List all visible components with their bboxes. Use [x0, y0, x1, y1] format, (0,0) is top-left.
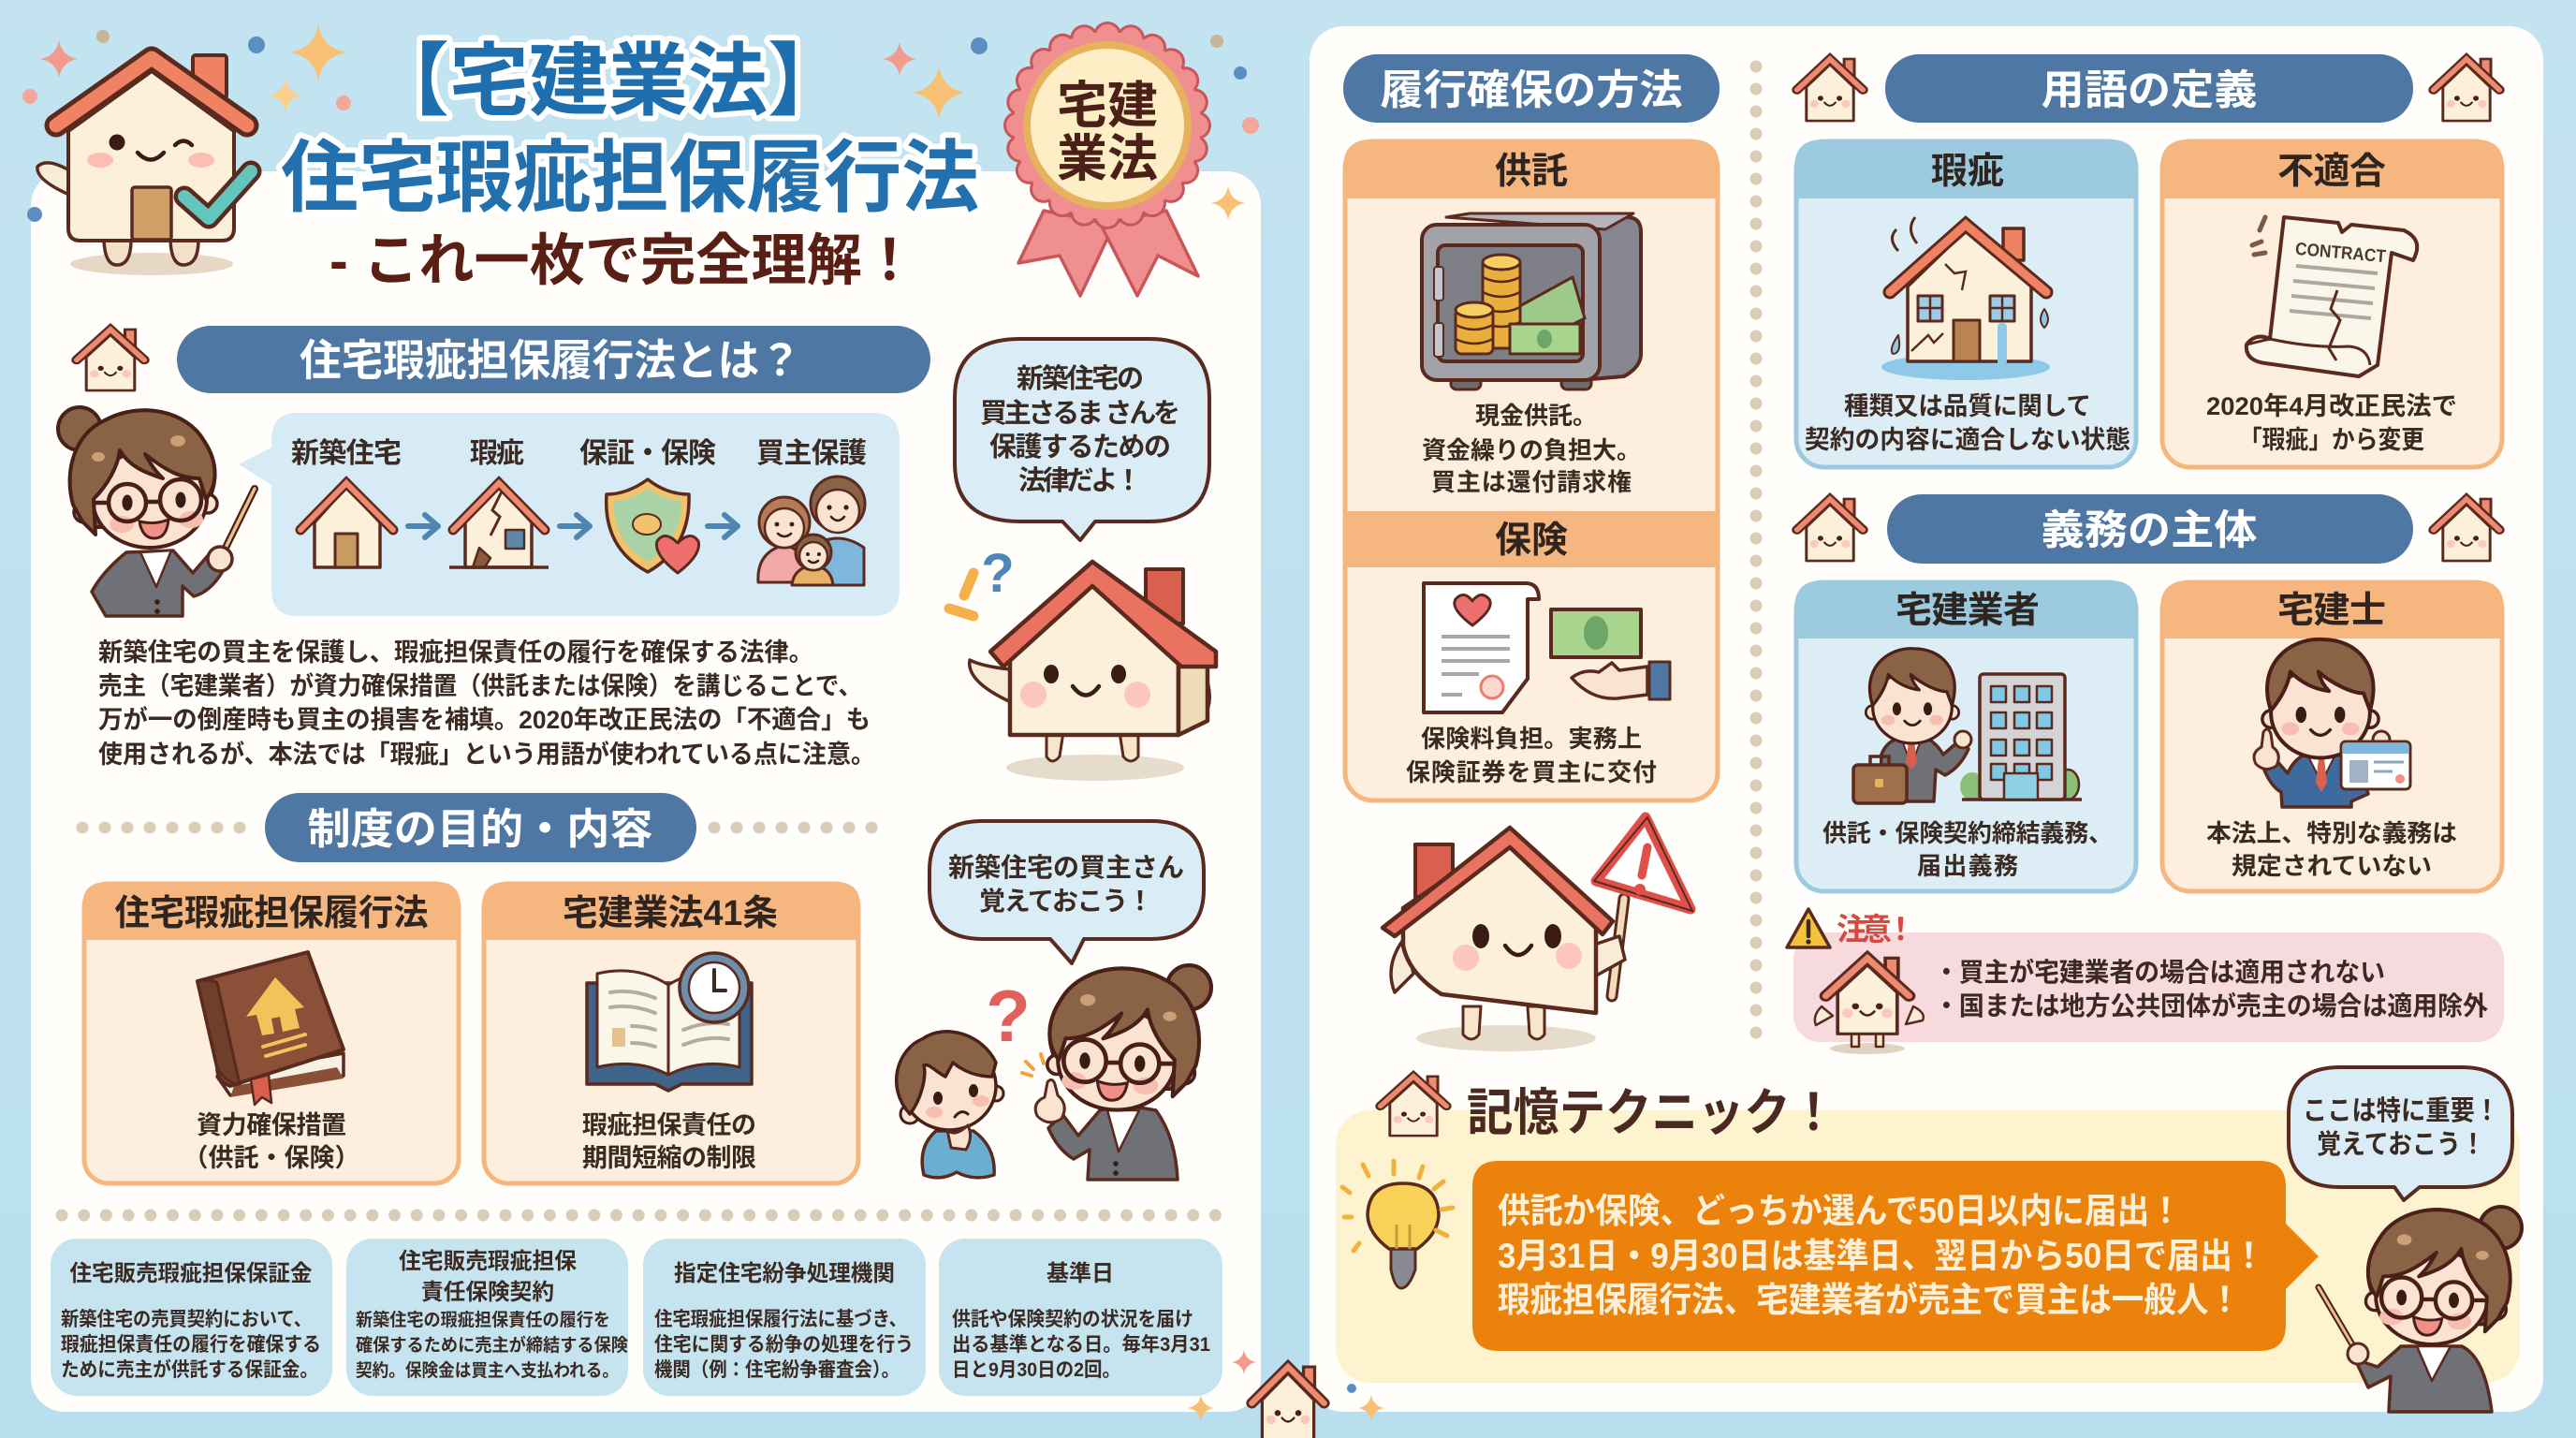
callout: 注意	[1787, 909, 2504, 1054]
icon: safe with money	[1422, 213, 1641, 389]
caption 不適合: 2020年4月改正民法で	[2206, 392, 2457, 420]
text block: law description	[98, 638, 875, 769]
flow label: 保証・保険	[579, 438, 716, 469]
card: 指定住宅紛争処理機関: 住宅瑕疵担保履行法に基づき、	[654, 1309, 907, 1330]
arrow	[560, 515, 590, 537]
icon: businessman with building	[1853, 649, 2082, 803]
icon: mini house	[1797, 59, 1863, 121]
warning items: ・買主が宅建業者の場合は適用されない	[1934, 957, 2385, 987]
badge text: 宅建	[1057, 78, 1158, 134]
caption 宅建士: 本法上、特別な義務は	[2206, 819, 2457, 847]
icon: torn contract	[2247, 217, 2417, 376]
flow label: 瑕疵	[470, 438, 524, 469]
badge: rosette 宅建業法	[1014, 32, 1201, 296]
heading: 義務の主体	[1887, 494, 2413, 564]
arrow	[408, 515, 438, 537]
character: confused boy: ?	[986, 975, 1031, 1057]
panel: left white sheet	[31, 171, 1261, 1412]
card: 供託 and 保険: 保険証券を買主に交付	[1406, 758, 1657, 786]
header 供託: 供託	[1495, 152, 1568, 192]
card: 宅建士: 規定されていない	[2232, 852, 2432, 880]
card: 瑕疵	[1794, 139, 2138, 467]
card: 住宅販売瑕疵担保保証金: ために売主が供託する保証金。	[61, 1358, 318, 1381]
heading: 用語の定義: 用語の定義	[2041, 67, 2258, 113]
caption 供託: 現金供託。	[1475, 402, 1597, 430]
caption 保険: 保険料負担。実務上	[1421, 725, 1642, 753]
mnemonic line: 瑕疵担保履行法、宅建業者が売主で買主は一般人！	[1498, 1281, 2241, 1319]
panel: flow diagram	[239, 413, 900, 616]
heading: 用語の定義	[1885, 54, 2413, 123]
heading: 制度の目的・内容	[77, 793, 878, 862]
title line 3: - これ一枚で完全理解！	[329, 229, 917, 292]
text block: law description: 万が一の倒産時も買主の損害を補填。2020年改正民法の「不適合」も	[98, 705, 871, 734]
caption 瑕疵: 種類又は品質に関して	[1844, 392, 2091, 420]
card: 住宅販売瑕疵担保責任保険契約: 住宅販売瑕疵担保	[399, 1249, 577, 1274]
decorative sparkles around title	[22, 24, 1259, 222]
dotted divider	[62, 1210, 1226, 1221]
speech bubble: protect buyers: 買主さるま さんを	[980, 398, 1180, 429]
card: 不適合	[2160, 139, 2504, 467]
icon: cracked house	[449, 483, 549, 567]
character: house mascot with question mark: ?	[981, 543, 1015, 604]
character: teacher with pointer	[58, 407, 255, 616]
card: 瑕疵: 契約の内容に適合しない状態	[1805, 426, 2130, 454]
card: 住宅販売瑕疵担保保証金: 住宅販売瑕疵担保保証金	[69, 1261, 313, 1286]
speech bubble: important: 覚えておこう！	[2317, 1129, 2485, 1160]
card: 指定住宅紛争処理機関: 住宅に関する紛争の処理を行う	[654, 1334, 914, 1356]
speech bubble: protect buyers	[955, 339, 1209, 540]
icon: licensed agent with ID card	[2254, 639, 2410, 807]
icon: mini house	[2434, 499, 2499, 561]
card: 基準日: 基準日	[1046, 1261, 1114, 1286]
card: 住宅販売瑕疵担保責任保険契約	[346, 1239, 628, 1396]
card: 宅建業者	[1794, 580, 2138, 891]
icon: damaged leaking house	[1881, 217, 2050, 380]
flow label: 新築住宅	[291, 438, 402, 469]
card: 住宅販売瑕疵担保責任保険契約: 新築住宅の瑕疵担保責任の履行を	[356, 1309, 610, 1330]
speech bubble: important	[2289, 1067, 2512, 1200]
arrow	[708, 515, 738, 537]
icon: law book	[198, 952, 344, 1105]
speech bubble: remember	[929, 821, 1204, 963]
card: 住宅販売瑕疵担保保証金: 瑕疵担保責任の履行を確保する	[61, 1334, 321, 1356]
character: teacher with pointer	[2319, 1207, 2522, 1412]
icon: mini house	[1797, 499, 1863, 561]
text block: law description: 売主（宅建業者）が資力確保措置（供託または保険）を講じることで、	[98, 671, 862, 700]
icon: house mascot with check mark	[37, 55, 251, 275]
card: 住宅瑕疵担保履行法: （供託・保険）	[183, 1144, 359, 1172]
card caption: 瑕疵担保責任の	[582, 1111, 756, 1139]
card: 宅建業者: 届出義務	[1917, 852, 2018, 880]
header 保険: 保険	[1495, 521, 1568, 561]
panel: right white sheet	[1310, 26, 2543, 1412]
speech bubble: important: ここは特に重要！	[2303, 1095, 2499, 1126]
speech bubble: protect buyers: 新築住宅の	[1017, 363, 1144, 394]
card: 宅建業法41条: 宅建業法41条	[563, 894, 778, 933]
card: 不適合: 「瑕疵」から変更	[2239, 426, 2424, 454]
heading: 履行確保の方法: 履行確保の方法	[1380, 67, 1683, 113]
caption 宅建業者: 供託・保険契約締結義務、	[1822, 819, 2113, 847]
icon: mini house	[77, 330, 144, 390]
title line 2: 住宅瑕疵担保履行法	[281, 134, 979, 222]
icon: torn contract: CONTRACT	[2294, 240, 2387, 267]
card: 供託 and 保険: 買主は還付請求権	[1431, 468, 1632, 496]
card: 瑕疵: 瑕疵	[1931, 152, 2004, 192]
card: 住宅販売瑕疵担保保証金	[51, 1239, 332, 1396]
callout: 注意: ・国または地方公共団体が売主の場合は適用除外	[1934, 990, 2488, 1020]
heading: 記憶テクニック！: 記憶テクニック！	[1467, 1085, 1837, 1141]
card: 宅建士: 宅建士	[2277, 591, 2386, 631]
heading: 義務の主体: 義務の主体	[2041, 507, 2258, 553]
card: 基準日: 出る基準となる日。毎年3月31	[952, 1334, 1210, 1356]
icon: house	[1381, 1077, 1446, 1136]
dotted vertical divider	[1750, 66, 1762, 1035]
pink box	[1793, 932, 2504, 1042]
icon: bottom center house	[1188, 1350, 1384, 1438]
icon: new house	[300, 483, 393, 567]
card: 宅建業者: 宅建業者	[1895, 591, 2040, 631]
card: 供託 and 保険: 資金繰りの負担大。	[1422, 436, 1641, 464]
title	[281, 37, 979, 292]
card: 住宅瑕疵担保履行法: 住宅瑕疵担保履行法	[114, 894, 429, 933]
heading 注意: 注意！	[1837, 912, 1916, 946]
heading: 住宅瑕疵担保履行法とは？	[177, 326, 930, 393]
character: teacher raising finger	[1022, 965, 1211, 1180]
icon: open book with clock	[587, 953, 752, 1091]
card: 供託 and 保険	[1343, 139, 1720, 800]
speech bubble: protect buyers: 法律だよ！	[1018, 465, 1142, 496]
card: 指定住宅紛争処理機関	[643, 1239, 926, 1396]
icon: house	[1815, 958, 1924, 1054]
text block: law description: 新築住宅の買主を保護し、瑕疵担保責任の履行を確保する法律。	[98, 638, 813, 667]
card: 住宅販売瑕疵担保責任保険契約: 確保するために売主が締結する保険	[356, 1334, 628, 1356]
card: 住宅販売瑕疵担保責任保険契約: 責任保険契約	[421, 1280, 554, 1305]
card: 住宅瑕疵担保履行法	[82, 882, 461, 1183]
character: house mascot with warning sign	[1383, 817, 1692, 1051]
icon: shield and heart	[607, 479, 699, 573]
speech bubble: remember: 覚えておこう！	[979, 887, 1153, 916]
icon: light bulb	[1342, 1161, 1453, 1288]
icon: insurance policy and premium	[1424, 583, 1670, 712]
icon: family	[758, 477, 865, 585]
panel: memory technique	[1336, 1077, 2520, 1383]
card: 宅建士	[2160, 580, 2504, 891]
card: 住宅販売瑕疵担保責任保険契約: 契約。保険金は買主へ支払われる。	[356, 1360, 619, 1381]
card: 住宅販売瑕疵担保保証金: 新築住宅の売買契約において、	[61, 1309, 312, 1330]
flow label: 買主保護	[756, 438, 867, 469]
title line 1: 【宅建業法】	[370, 37, 847, 126]
text block: law description: 使用されるが、本法では「瑕疵」という用語が使われている点に注意。	[98, 740, 875, 769]
card: 宅建業法41条	[482, 882, 860, 1183]
heading: 住宅瑕疵担保履行法とは？: 住宅瑕疵担保履行法とは？	[300, 336, 801, 385]
mnemonic line: 供託か保険、どっちか選んで50日以内に届出！	[1498, 1192, 2182, 1230]
card: 基準日: 供託や保険契約の状況を届け	[952, 1309, 1193, 1330]
character: house mascot with question mark	[949, 543, 1216, 781]
card: 不適合: 不適合	[2277, 152, 2386, 192]
speech bubble: remember: 新築住宅の買主さん	[948, 853, 1184, 882]
card: 基準日: 日と9月30日の2回。	[952, 1359, 1120, 1381]
mnemonic line: 3月31日・9月30日は基準日、翌日から50日で届出！	[1498, 1237, 2265, 1275]
icon: warning triangle	[1787, 909, 1830, 947]
orange callout	[1472, 1161, 2319, 1351]
speech bubble: protect buyers: 保護するための	[989, 432, 1171, 462]
character: confused boy	[897, 975, 1031, 1178]
badge: rosette 宅建業法: 業法	[1057, 131, 1158, 187]
card: 指定住宅紛争処理機関: 機関（例：住宅紛争審査会）。	[654, 1359, 900, 1381]
card: 宅建業法41条: 期間短縮の制限	[582, 1144, 756, 1172]
card: 基準日	[939, 1239, 1222, 1396]
card: 指定住宅紛争処理機関: 指定住宅紛争処理機関	[674, 1261, 895, 1286]
card caption: 資力確保措置	[197, 1111, 346, 1139]
heading: 履行確保の方法	[1343, 54, 1720, 123]
heading: 制度の目的・内容: 制度の目的・内容	[307, 805, 653, 853]
icon: mini house	[2434, 59, 2499, 121]
